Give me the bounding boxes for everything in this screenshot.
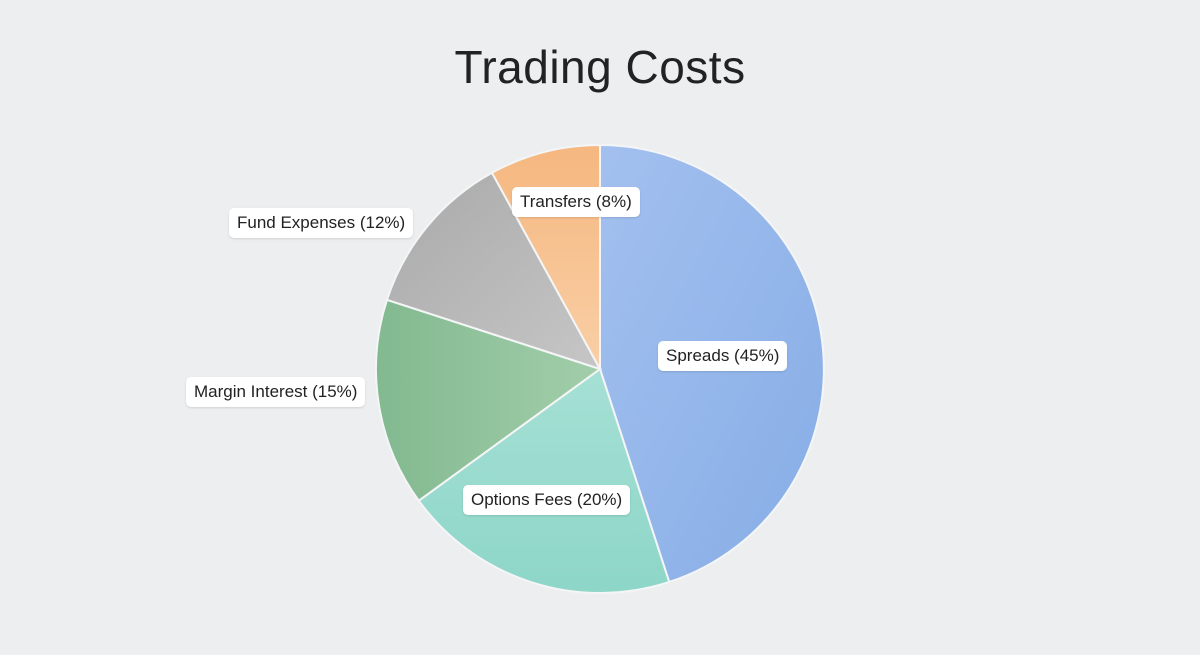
label: options fees: Options Fees (20%)	[471, 490, 622, 509]
slice: spreads	[600, 145, 824, 582]
label: transfers: Transfers (8%)	[520, 192, 632, 211]
slice: transfers	[492, 145, 600, 369]
slice: fund expenses	[387, 173, 600, 369]
label: fund expenses	[229, 208, 413, 238]
slice: options fees	[419, 369, 669, 593]
label: spreads: Spreads (45%)	[666, 346, 779, 365]
label: spreads	[658, 341, 787, 371]
label: fund expenses: Fund Expenses (12%)	[237, 213, 405, 232]
title: Trading Costs	[454, 41, 746, 93]
label: margin interest	[186, 377, 365, 407]
label: margin interest: Margin Interest (15%)	[194, 382, 357, 401]
label: options fees	[463, 485, 630, 515]
label: transfers	[512, 187, 640, 217]
slice: margin interest	[376, 300, 600, 501]
